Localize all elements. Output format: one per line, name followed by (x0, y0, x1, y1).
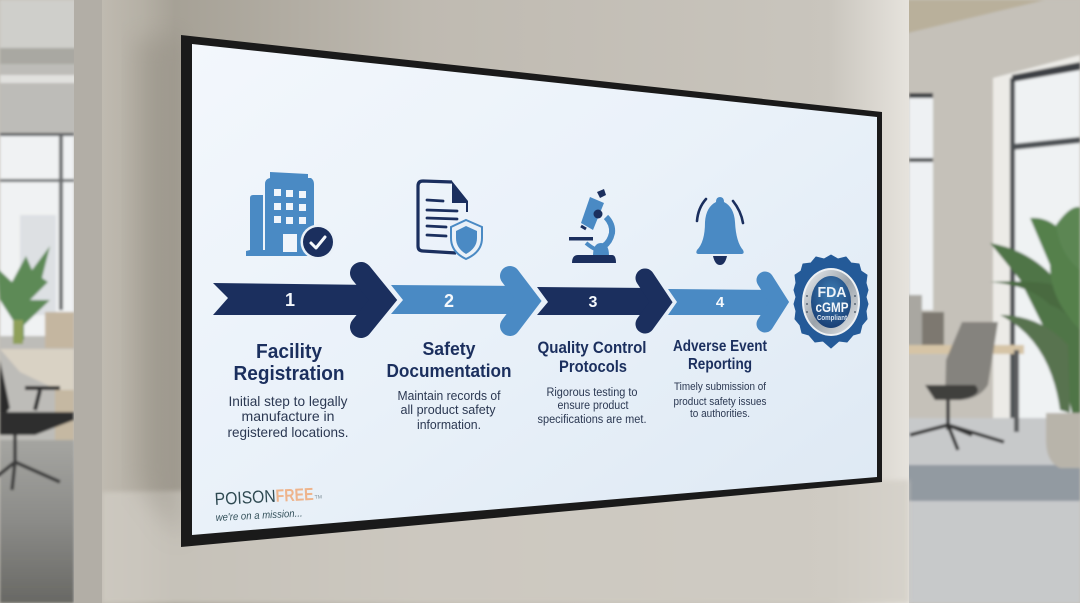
icon: building (246, 172, 336, 260)
description 4: to authorities. (690, 408, 750, 420)
step number 1: 1 (285, 290, 295, 310)
description 2: information. (417, 418, 481, 432)
logo: PoisonFree: we're on a mission... (215, 507, 303, 524)
title: Safety Documentation: Safety (422, 338, 476, 359)
description 1: registered locations. (228, 424, 348, 440)
title: Facility Registration: Facility (256, 341, 323, 363)
description 4 (674, 381, 767, 420)
icon: bell (696, 197, 744, 265)
title: Adverse Event Reporting (673, 338, 767, 373)
logo: PoisonFree: FREE (275, 484, 314, 506)
description 2 (398, 389, 501, 432)
logo: PoisonFree (214, 483, 323, 524)
title: Quality Control Protocols: Protocols (559, 358, 627, 376)
monitor shadow (135, 36, 180, 540)
description 1: Initial step to legally (228, 393, 348, 409)
title: Safety Documentation (386, 338, 512, 381)
step number 3: 3 (589, 294, 598, 311)
logo: PoisonFree: TM (315, 494, 322, 501)
arrow 4 (668, 280, 779, 324)
screen (192, 44, 877, 535)
logo: PoisonFree: POISON (214, 486, 276, 509)
step number 4: 4 (716, 294, 725, 311)
description 1: manufacture in (242, 408, 334, 424)
description 3: Rigorous testing to (546, 387, 638, 399)
description 4: Timely submission of (674, 381, 767, 393)
arrow 3 (537, 278, 661, 324)
background: concrete wall (102, 0, 909, 603)
step 4 group (668, 197, 779, 420)
step 3 group (537, 189, 661, 426)
description 2: Maintain records of (398, 389, 501, 403)
description 3: specifications are met. (538, 414, 646, 426)
arrow 2 (391, 276, 529, 326)
step 1 group (213, 172, 383, 440)
title: Facility Registration: Registration (234, 363, 344, 385)
title: Adverse Event Reporting: Adverse Event (673, 338, 767, 355)
description 3 (538, 387, 646, 426)
background: right office (906, 0, 1080, 603)
title: Adverse Event Reporting: Reporting (688, 356, 752, 373)
icon: document with shield (418, 181, 482, 259)
background: wall lower light (102, 480, 909, 603)
description 1 (228, 393, 348, 440)
badge: FDA cGMP Compliant: FDA (818, 284, 847, 301)
badge: FDA cGMP Compliant (794, 255, 868, 348)
badge: FDA cGMP Compliant: Compliant (817, 315, 848, 322)
icon: microscope (569, 189, 616, 263)
description 3: ensure product (558, 400, 629, 412)
title: Safety Documentation: Documentation (386, 360, 512, 381)
monitor frame (181, 35, 882, 547)
description 4: product safety issues (674, 396, 767, 408)
title: Facility Registration (234, 341, 344, 385)
background: wall edge pillar (74, 0, 102, 603)
badge: FDA cGMP Compliant: cGMP (816, 299, 848, 315)
background: left office seen through opening (0, 0, 76, 603)
title: Quality Control Protocols (538, 339, 646, 376)
step number 2: 2 (444, 291, 454, 311)
step 2 group (386, 181, 529, 432)
arrow 1 (213, 273, 383, 327)
description 2: all product safety (400, 403, 496, 417)
title: Quality Control Protocols: Quality Control (538, 339, 646, 357)
